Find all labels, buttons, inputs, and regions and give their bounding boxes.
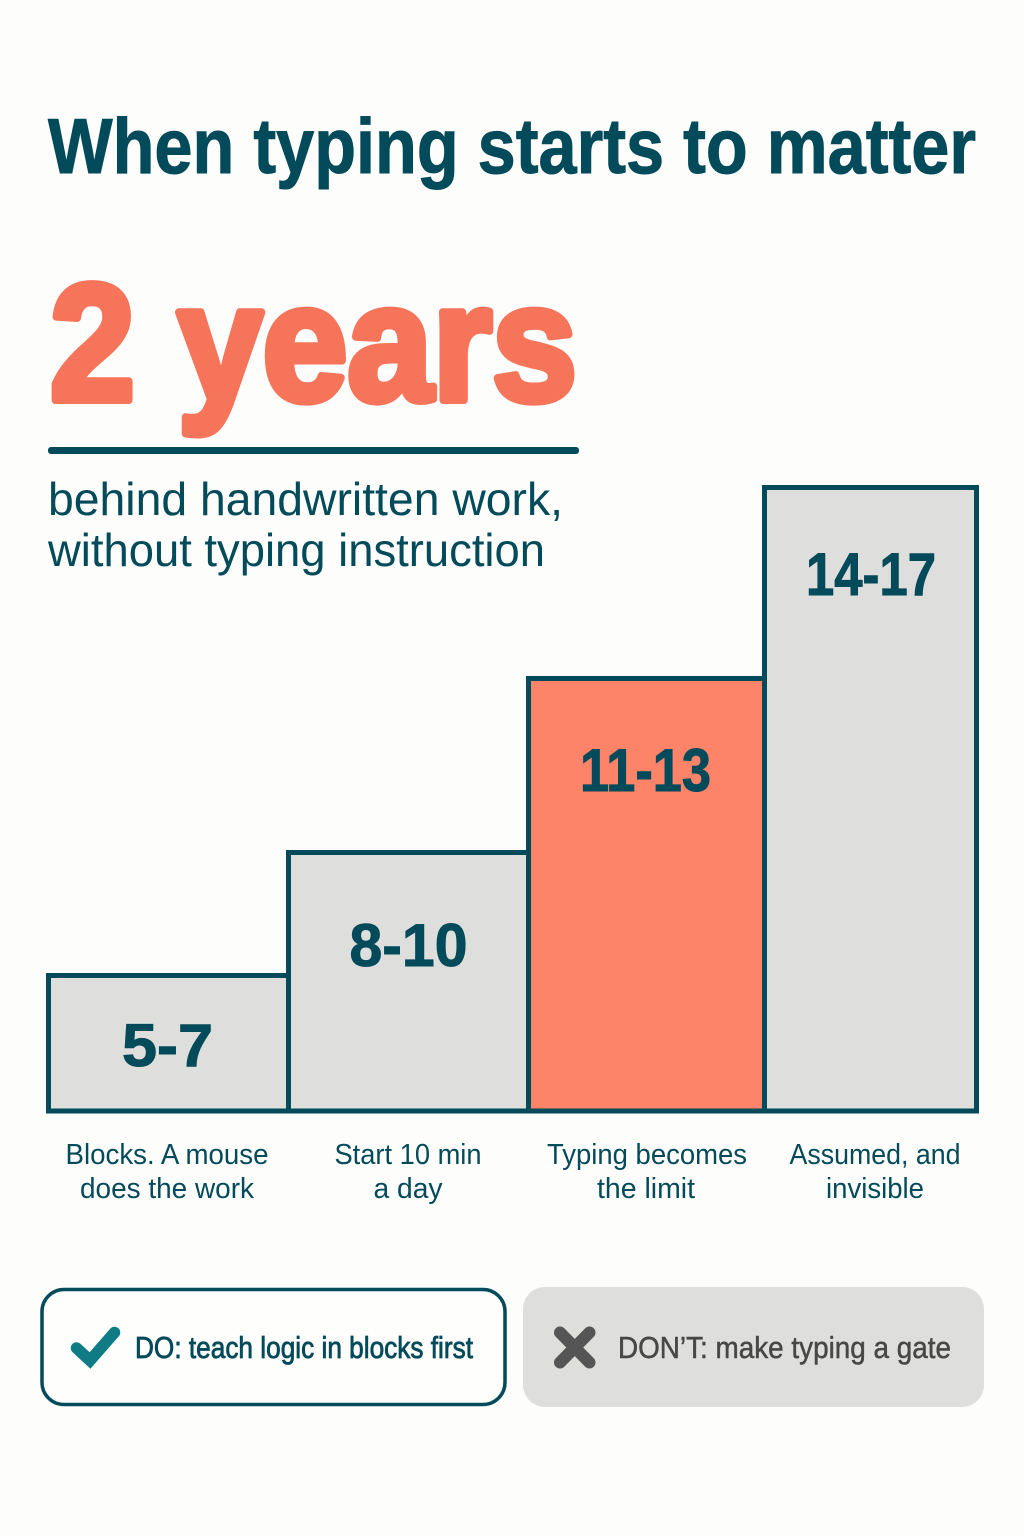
stat description: without typing instruction xyxy=(47,524,545,576)
stat description: behind handwritten work, xyxy=(48,473,563,525)
label: ages 8-10: Start 10 min xyxy=(334,1139,482,1171)
key stat: 2 years: 2 years xyxy=(50,251,577,436)
bar: ages 8-10 xyxy=(288,852,528,1111)
don't text: DON’T: make typing a gate xyxy=(618,1330,951,1365)
label: ages 5-7 xyxy=(66,1139,268,1205)
label: ages 5-7: Blocks. A mouse xyxy=(66,1139,268,1171)
icon: cross xyxy=(560,1332,590,1362)
stat description xyxy=(47,473,563,576)
bar: ages 5-7: 5-7 xyxy=(122,1012,213,1079)
panel: don't xyxy=(523,1287,984,1407)
bar: ages 11-13 (highlighted): 11-13 xyxy=(580,737,711,804)
label: ages 11-13: the limit xyxy=(597,1173,695,1205)
bar: ages 5-7 xyxy=(48,976,288,1111)
bar: ages 11-13 (highlighted) xyxy=(528,678,764,1111)
bar: ages 14-17: 14-17 xyxy=(806,541,936,608)
bar: ages 14-17 xyxy=(764,488,976,1111)
label: ages 14-17: invisible xyxy=(826,1173,924,1205)
label: ages 8-10: a day xyxy=(374,1173,443,1205)
label: ages 11-13 xyxy=(547,1139,747,1205)
label: ages 8-10 xyxy=(334,1139,482,1205)
label: ages 14-17 xyxy=(790,1139,960,1205)
stat underline xyxy=(48,447,579,454)
bar: ages 8-10: 8-10 xyxy=(350,912,468,979)
panel: do xyxy=(42,1290,505,1404)
icon: check mark xyxy=(76,1332,114,1360)
label: ages 5-7: does the work xyxy=(80,1173,254,1205)
staircase bar chart xyxy=(48,488,976,1111)
do text: DO: teach logic in blocks first xyxy=(135,1330,473,1365)
label: ages 11-13: Typing becomes xyxy=(547,1139,747,1171)
label: ages 14-17: Assumed, and xyxy=(790,1139,960,1171)
